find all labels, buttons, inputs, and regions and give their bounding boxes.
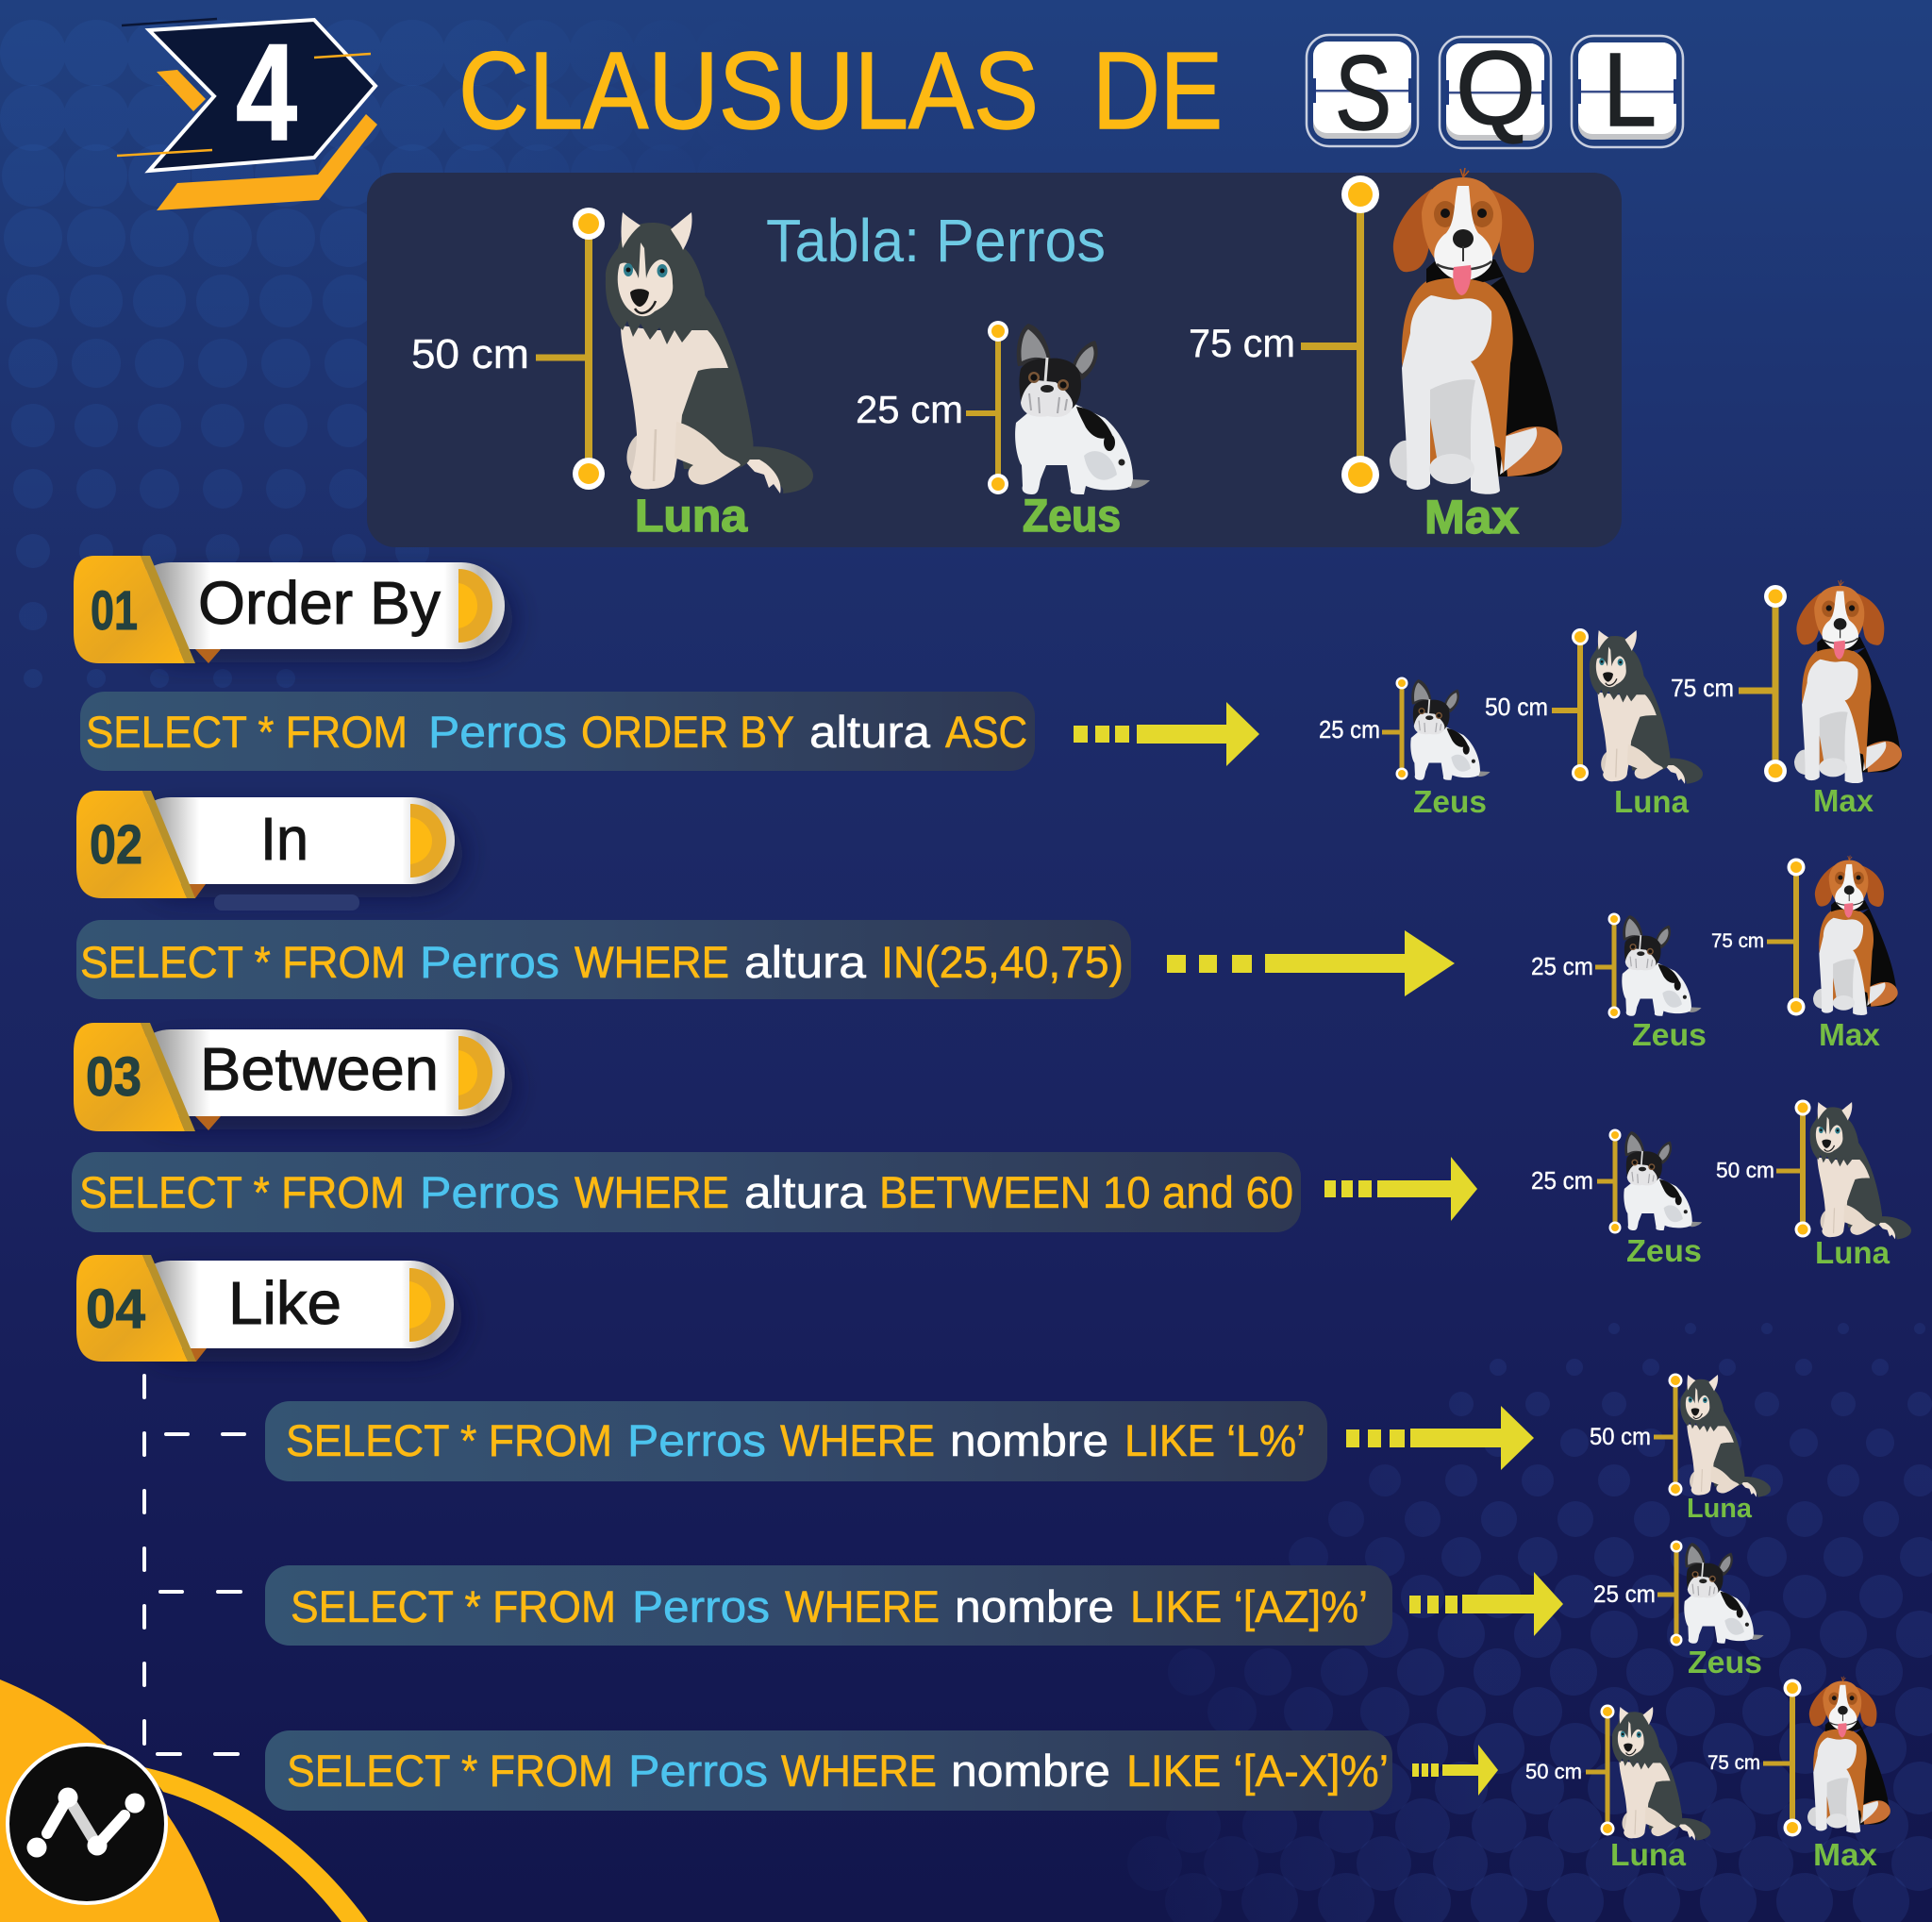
- result 3: Luna: 50 cm: [1716, 1158, 1774, 1182]
- number badge: 4: 4: [236, 15, 297, 169]
- query bar 1: altura: [809, 707, 931, 757]
- tile S: [1307, 34, 1418, 152]
- background dots: lower right: [1155, 1329, 1932, 1901]
- tile Q: Q: [1456, 30, 1536, 146]
- query bar 4a: Perros: [627, 1415, 766, 1465]
- query bar 1: [80, 692, 1035, 771]
- arrow 3: [1324, 1157, 1477, 1221]
- section 02 heading: In: [76, 791, 455, 911]
- background dots: upper left: [33, 53, 755, 678]
- SQL letter tiles: [1307, 30, 1683, 152]
- result 2: Zeus: Zeus: [1632, 1017, 1707, 1052]
- arrow 4c: [1412, 1745, 1498, 1796]
- arrow 2: [1167, 930, 1455, 996]
- arrow 4b: [1409, 1572, 1563, 1636]
- Luna entry: 50 cm: [411, 331, 529, 377]
- result 4c: Max: Max: [1813, 1837, 1878, 1872]
- result 3: Zeus: Zeus: [1626, 1233, 1702, 1268]
- title: CLAUSULAS: [458, 29, 1039, 152]
- query bar 1: Perros: [428, 707, 567, 757]
- dashed tree connector: [144, 1376, 244, 1754]
- query bar 4b: [265, 1565, 1392, 1646]
- query bar 4c: nombre: [951, 1746, 1110, 1796]
- result 2: Zeus: [1531, 913, 1707, 1052]
- query bar 2: Perros: [420, 937, 559, 987]
- Max entry: 75 cm: [1189, 321, 1295, 365]
- section 02 heading: In: 02: [90, 814, 142, 876]
- result 4b: Zeus: 25 cm: [1593, 1581, 1656, 1608]
- arrow 4a: [1346, 1406, 1534, 1470]
- section 02 heading: In: In: [260, 805, 308, 873]
- result 2: Zeus: 25 cm: [1531, 952, 1593, 980]
- result 4c: Max: 75 cm: [1707, 1752, 1760, 1774]
- result 2: Max: Max: [1819, 1017, 1881, 1052]
- result 4c: Luna: Luna: [1610, 1837, 1687, 1872]
- Luna entry: Luna: [635, 492, 747, 542]
- result 4b: Zeus: Zeus: [1688, 1645, 1762, 1680]
- section 03 heading: Between: Between: [200, 1035, 439, 1103]
- tile L: L: [1603, 32, 1657, 148]
- query bar 3: SELECT * FROM: [79, 1167, 405, 1217]
- query bar 4b: LIKE ‘[AZ]%’: [1130, 1581, 1368, 1631]
- query bar 4b: SELECT * FROM: [291, 1581, 616, 1631]
- Zeus entry: 25 cm: [856, 388, 963, 431]
- tile L: [1572, 32, 1683, 148]
- arrow 1: [1074, 702, 1259, 766]
- panel: tabla perros: [367, 168, 1622, 547]
- query bar 4b: WHERE: [785, 1581, 940, 1631]
- query bar 3: Perros: [420, 1167, 559, 1217]
- query bar 4b: nombre: [955, 1581, 1114, 1631]
- result 4a: Luna: 50 cm: [1590, 1424, 1651, 1450]
- section 04 heading: Like: 04: [86, 1279, 145, 1340]
- result 3: Zeus: 25 cm: [1531, 1166, 1593, 1195]
- result 1: Luna: 50 cm: [1485, 693, 1548, 721]
- query bar 1: SELECT * FROM: [86, 707, 408, 757]
- result 4c: Max: [1707, 1677, 1890, 1872]
- section 03 heading: Between: [74, 1023, 505, 1131]
- query bar 4c: WHERE: [781, 1746, 937, 1796]
- title: DE: [1092, 29, 1223, 152]
- section 04 heading: Like: [76, 1255, 454, 1362]
- result 1: Max: 75 cm: [1671, 674, 1734, 702]
- result 1: Max: Max: [1813, 783, 1874, 818]
- tile S: S: [1335, 34, 1391, 152]
- query bar 2: WHERE: [575, 937, 729, 987]
- result 4c: Luna: [1525, 1704, 1710, 1872]
- result 4b: Zeus: [1593, 1540, 1764, 1680]
- query bar 4c: SELECT * FROM: [287, 1746, 613, 1796]
- Zeus entry: [856, 321, 1150, 542]
- result 3: Luna: [1716, 1100, 1911, 1270]
- result 1: Max: [1671, 580, 1902, 818]
- result 1: Luna: [1485, 628, 1703, 819]
- query bar 4a: SELECT * FROM: [286, 1415, 612, 1465]
- table heading: Tabla: Perros: [766, 207, 1106, 275]
- query bar 2: IN(25,40,75): [881, 937, 1124, 987]
- section 01 heading: Order By: 01: [91, 580, 138, 642]
- query bar 1: ASC: [945, 707, 1027, 757]
- query bar 2: SELECT * FROM: [80, 937, 406, 987]
- section 01 heading: Order By: [74, 556, 505, 663]
- result 3: Luna: Luna: [1815, 1235, 1890, 1270]
- query bar 4a: LIKE ‘L%’: [1124, 1415, 1306, 1465]
- query bar 2: [76, 920, 1131, 999]
- result 2: Max: [1711, 856, 1898, 1052]
- query bar 3: BETWEEN 10 and 60: [879, 1167, 1293, 1217]
- Luna entry: [411, 208, 813, 542]
- query bar 3: WHERE: [575, 1167, 729, 1217]
- result 1: Luna: Luna: [1614, 784, 1690, 819]
- query bar 4c: LIKE ‘[A-X]%’: [1126, 1746, 1389, 1796]
- logo: [8, 1745, 166, 1903]
- query bar 4c: Perros: [628, 1746, 768, 1796]
- result 1: Zeus: 25 cm: [1319, 715, 1380, 744]
- query bar 4b: Perros: [632, 1581, 770, 1631]
- result 4a: Luna: Luna: [1687, 1494, 1753, 1524]
- result 1: Zeus: [1319, 677, 1491, 819]
- result 4a: Luna: [1590, 1374, 1771, 1524]
- query bar 4c: [265, 1730, 1392, 1811]
- section 03 heading: Between: 03: [86, 1046, 142, 1108]
- Max entry: [1189, 168, 1562, 543]
- query bar 4a: nombre: [950, 1415, 1108, 1465]
- query bar 3: altura: [744, 1167, 867, 1217]
- query bar 4a: [265, 1401, 1327, 1481]
- query bar 3: [72, 1152, 1301, 1232]
- Zeus entry: Zeus: [1023, 492, 1121, 542]
- result 2: Max: 75 cm: [1711, 930, 1764, 952]
- query bar 1: ORDER BY: [581, 707, 794, 757]
- result 3: Zeus: [1531, 1128, 1702, 1268]
- section 01 heading: Order By: Order By: [198, 569, 441, 637]
- corner decoration: [0, 1680, 368, 1922]
- query bar 2: altura: [744, 937, 867, 987]
- result 1: Zeus: Zeus: [1413, 784, 1487, 819]
- result 4c: Luna: 50 cm: [1525, 1760, 1582, 1783]
- query bar 4a: WHERE: [780, 1415, 935, 1465]
- section 04 heading: Like: Like: [228, 1269, 341, 1337]
- Max entry: Max: [1424, 491, 1519, 543]
- number badge: 4: [117, 15, 377, 210]
